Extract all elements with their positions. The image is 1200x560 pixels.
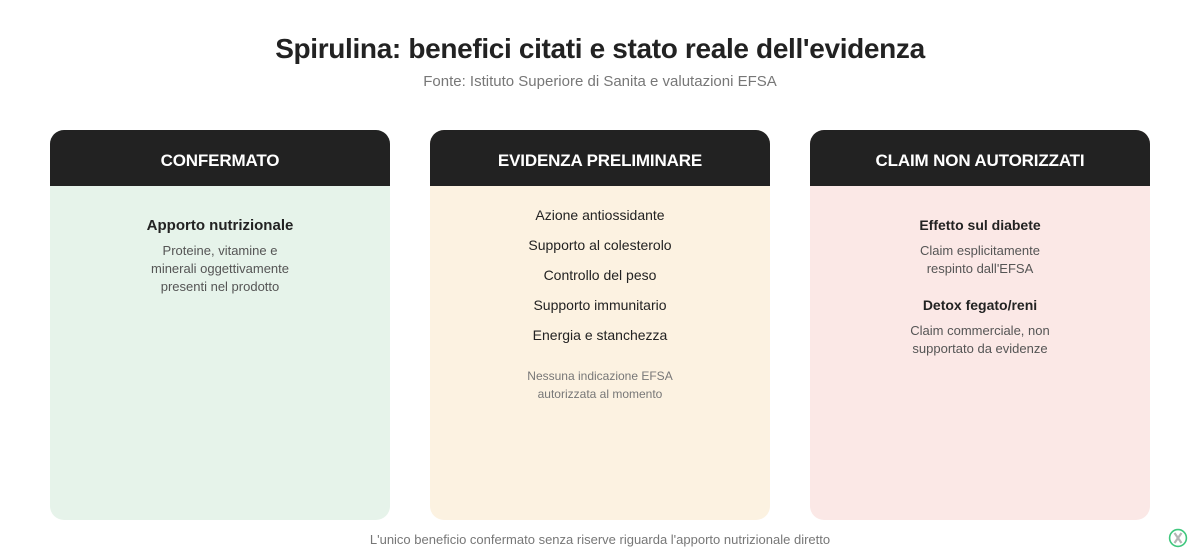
title: Spirulina: benefici citati e stato reale dell'evidenza (275, 33, 925, 64)
note: nessuna indicazione EFSA: Nessuna indicazione EFSA (527, 369, 673, 383)
panel: confermato (50, 130, 390, 520)
panel heading: confermato: CONFERMATO (161, 151, 279, 170)
panel: evidenza preliminare (430, 130, 770, 520)
description: apporto nutrizionale (151, 243, 289, 294)
panel heading: evidenza preliminare: EVIDENZA PRELIMINARE (498, 151, 702, 170)
footer note: L'unico beneficio confermato senza riserve riguarda l'apporto nutrizionale diretto (370, 532, 830, 547)
note: nessuna indicazione EFSA: autorizzata al momento (538, 387, 662, 401)
item: supporto al colesterolo: Supporto al colesterolo (528, 237, 672, 253)
description: apporto nutrizionale: Proteine, vitamine e (163, 243, 277, 258)
item: controllo del peso: Controllo del peso (544, 267, 656, 283)
item: apporto nutrizionale: Apporto nutrizionale (147, 217, 293, 234)
item: supporto immunitario: Supporto immunitario (533, 297, 667, 313)
item: effetto sul diabete: Effetto sul diabete (919, 217, 1041, 233)
item: energia e stanchezza: Energia e stanchezza (533, 327, 667, 343)
description: effetto sul diabete: Claim esplicitamente (920, 243, 1040, 258)
description: detox fegato/reni (910, 323, 1050, 356)
icon: badge (1168, 528, 1188, 548)
item: azione antiossidante: Azione antiossidante (535, 207, 665, 223)
description: effetto sul diabete (920, 243, 1040, 276)
description: detox fegato/reni: Claim commerciale, non (910, 323, 1050, 338)
panel: claim non autorizzati (810, 130, 1150, 520)
panel heading: evidenza preliminare (430, 130, 770, 186)
panel heading: confermato (50, 130, 390, 186)
subtitle: Fonte: Istituto Superiore di Sanita e valutazioni EFSA (423, 73, 777, 90)
description: apporto nutrizionale: minerali oggettivamente (151, 261, 289, 276)
item: detox fegato/reni: Detox fegato/reni (923, 297, 1037, 313)
description: apporto nutrizionale: presenti nel prodotto (161, 279, 279, 294)
description: detox fegato/reni: supportato da evidenze (912, 341, 1048, 356)
panel heading: claim non autorizzati: CLAIM NON AUTORIZZATI (875, 151, 1084, 170)
description: effetto sul diabete: respinto dall'EFSA (927, 261, 1033, 276)
panel heading: claim non autorizzati (810, 130, 1150, 186)
note: nessuna indicazione EFSA (527, 369, 673, 401)
